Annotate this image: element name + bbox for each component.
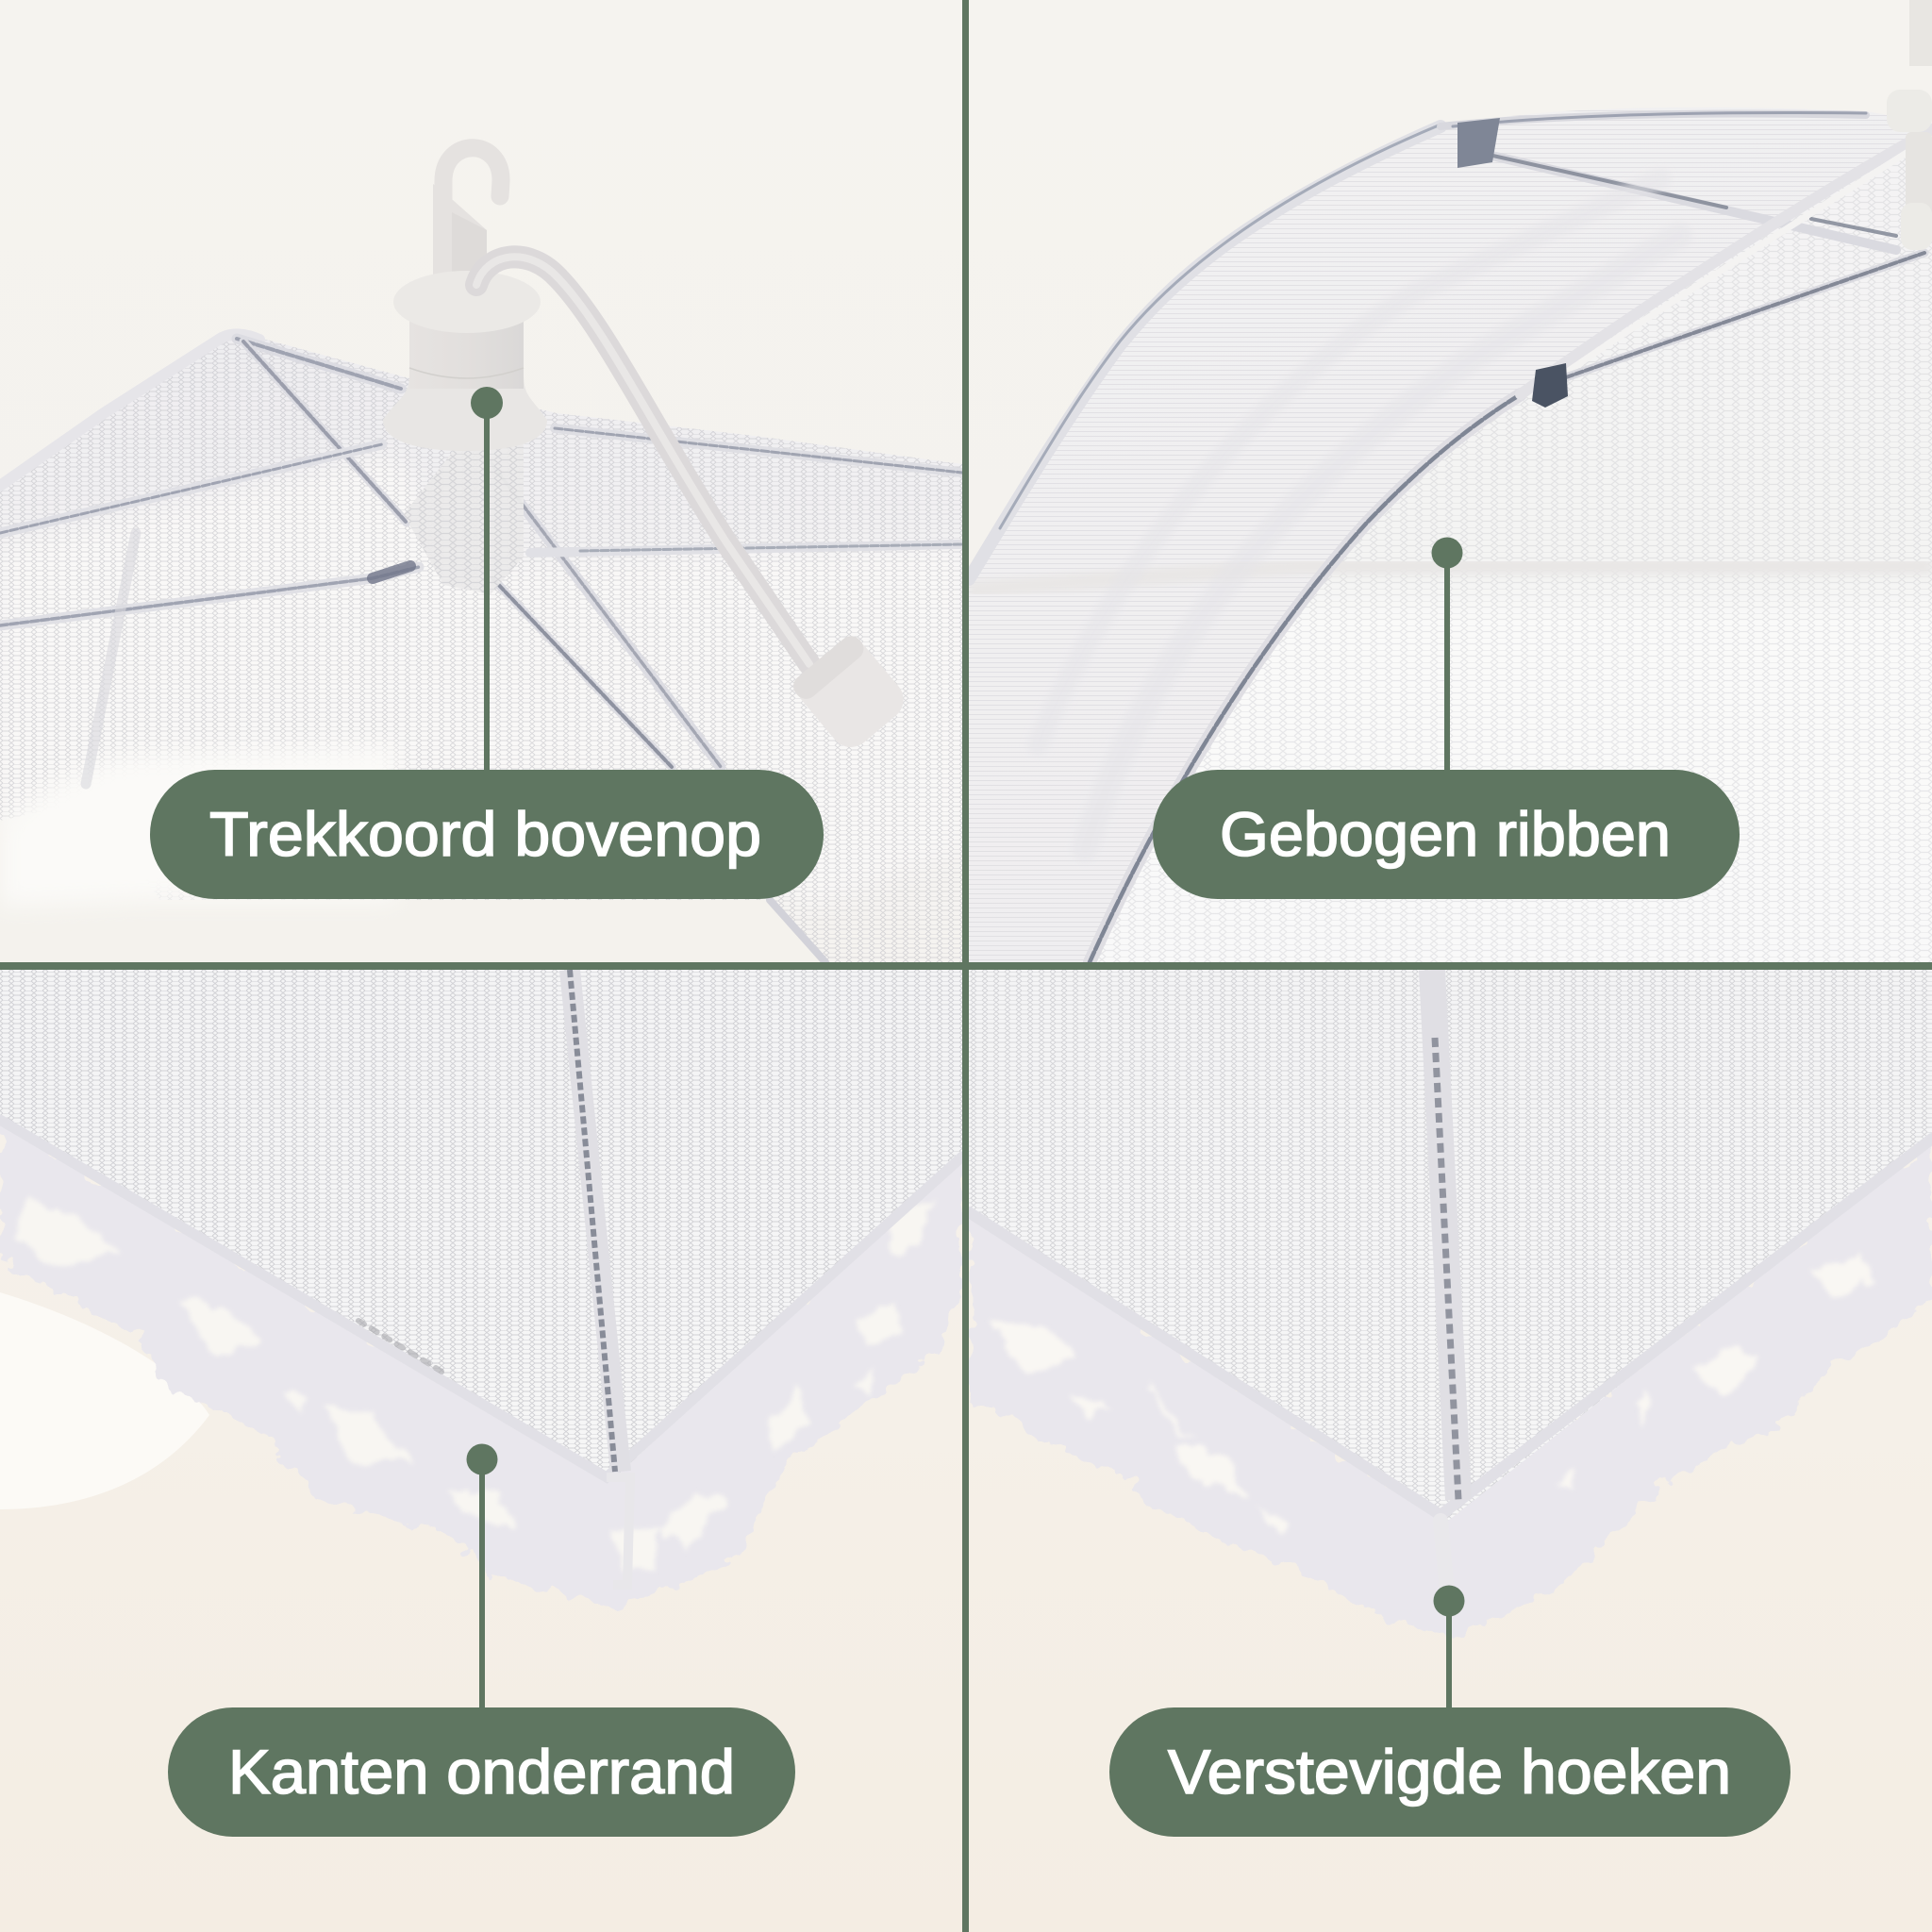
divider: vertical — [962, 0, 969, 1932]
callout: gebogen ribben — [1153, 538, 1740, 899]
leader line — [1446, 1601, 1452, 1712]
icon: top knob — [1887, 0, 1932, 250]
marker dot — [471, 387, 503, 419]
callout: verstevigde hoeken — [1109, 1585, 1790, 1837]
marker dot — [466, 1443, 498, 1475]
net ribs — [0, 334, 962, 962]
net dome — [969, 970, 1932, 1521]
rim seam — [0, 1120, 962, 1477]
callout: trekkoord bovenop — [150, 387, 824, 899]
leader line — [1444, 553, 1450, 775]
panel: kanten onderrand — [0, 970, 962, 1932]
marker dot — [1434, 1585, 1464, 1617]
marker dot — [1432, 538, 1462, 568]
label text: Gebogen ribben — [1220, 799, 1671, 869]
panel: trekkoord bovenop — [0, 140, 962, 962]
outer rim and ribs — [969, 113, 1932, 962]
label pill — [1109, 1707, 1790, 1837]
panel: verstevigde hoeken — [969, 970, 1932, 1932]
rim seam — [969, 1133, 1932, 1521]
icon: hook — [433, 148, 501, 283]
label text: Trekkoord bovenop — [209, 799, 761, 869]
leader line — [479, 1459, 485, 1712]
label pill — [1153, 770, 1740, 899]
net dome — [0, 970, 962, 1477]
label pill — [168, 1707, 795, 1837]
lace border — [0, 1123, 962, 1607]
net canopy — [0, 334, 962, 962]
icon: cord end cap — [793, 636, 904, 747]
callout: kanten onderrand — [168, 1443, 795, 1837]
icon: drawcord — [476, 257, 809, 664]
panel: gebogen ribben — [969, 0, 1932, 962]
icon: cord stopper — [383, 271, 547, 594]
dome net — [969, 108, 1932, 962]
soft light spot — [0, 1292, 209, 1509]
label pill — [150, 770, 824, 899]
centre rib — [570, 970, 630, 1585]
leader line — [484, 403, 490, 775]
centre rib — [1432, 970, 1458, 1500]
label text: Kanten onderrand — [228, 1737, 735, 1807]
divider: horizontal — [0, 962, 1932, 970]
rib joints — [1457, 118, 1568, 408]
label text: Verstevigde hoeken — [1168, 1737, 1731, 1807]
lace border — [969, 1139, 1932, 1638]
